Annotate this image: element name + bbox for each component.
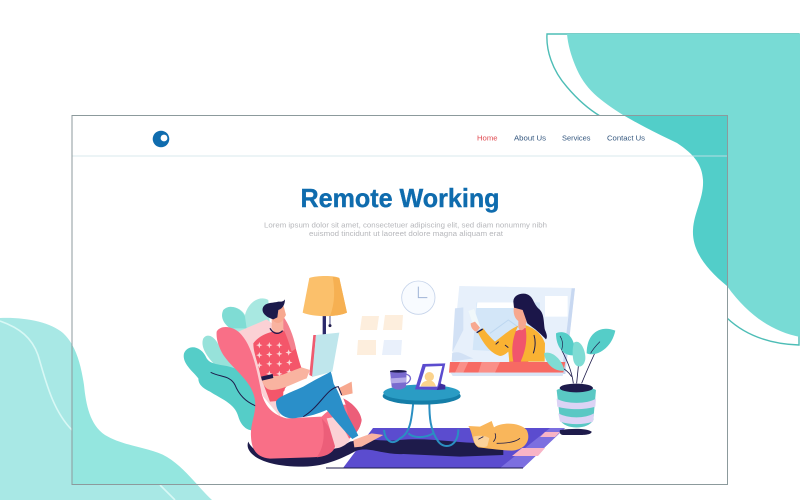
navigation: Home bbox=[477, 134, 498, 142]
illustration: clock bbox=[402, 281, 435, 314]
armchair bbox=[217, 327, 362, 459]
shirt pattern bbox=[256, 342, 292, 377]
navigation: Services bbox=[562, 134, 591, 142]
chair back cushion bbox=[238, 319, 292, 417]
background blob: top right bbox=[547, 34, 800, 345]
illustration: leaves behind chair bbox=[184, 298, 270, 430]
arm bbox=[261, 367, 310, 390]
illustration: lamp bbox=[303, 276, 347, 335]
floor shadow bbox=[248, 439, 503, 467]
description text: Lorem ipsum dolor sit amet, consectetuer adipiscing elit, sed diam nonummy nibh bbox=[264, 220, 547, 230]
background blob: bottom left bbox=[0, 318, 212, 500]
illustration: man in armchair bbox=[217, 299, 503, 467]
illustration: sleeping cat bbox=[468, 421, 528, 451]
neck and head bbox=[272, 317, 283, 332]
legs bbox=[338, 382, 353, 396]
shirt bbox=[253, 330, 302, 402]
illustration: woman on video call bbox=[468, 294, 547, 362]
description text bbox=[264, 220, 547, 238]
sticky notes bbox=[357, 315, 403, 355]
laptop bbox=[309, 335, 316, 377]
navigation: About Us bbox=[514, 134, 546, 142]
illustration: potted plant bbox=[544, 329, 615, 435]
navigation bbox=[477, 134, 645, 142]
navigation: Contact Us bbox=[607, 134, 645, 142]
laptop base bbox=[283, 373, 327, 398]
illustration: side table with mug and photo frame bbox=[383, 363, 461, 446]
logo bbox=[153, 131, 169, 147]
illustration: rug bbox=[326, 428, 565, 468]
illustration: desk bbox=[449, 362, 565, 376]
page frame bbox=[72, 115, 728, 485]
illustration: video call screen bbox=[451, 286, 575, 374]
description text: euismod tincidunt ut laoreet dolore magna aliquam erat bbox=[309, 229, 504, 238]
title: Remote Working bbox=[300, 183, 500, 213]
